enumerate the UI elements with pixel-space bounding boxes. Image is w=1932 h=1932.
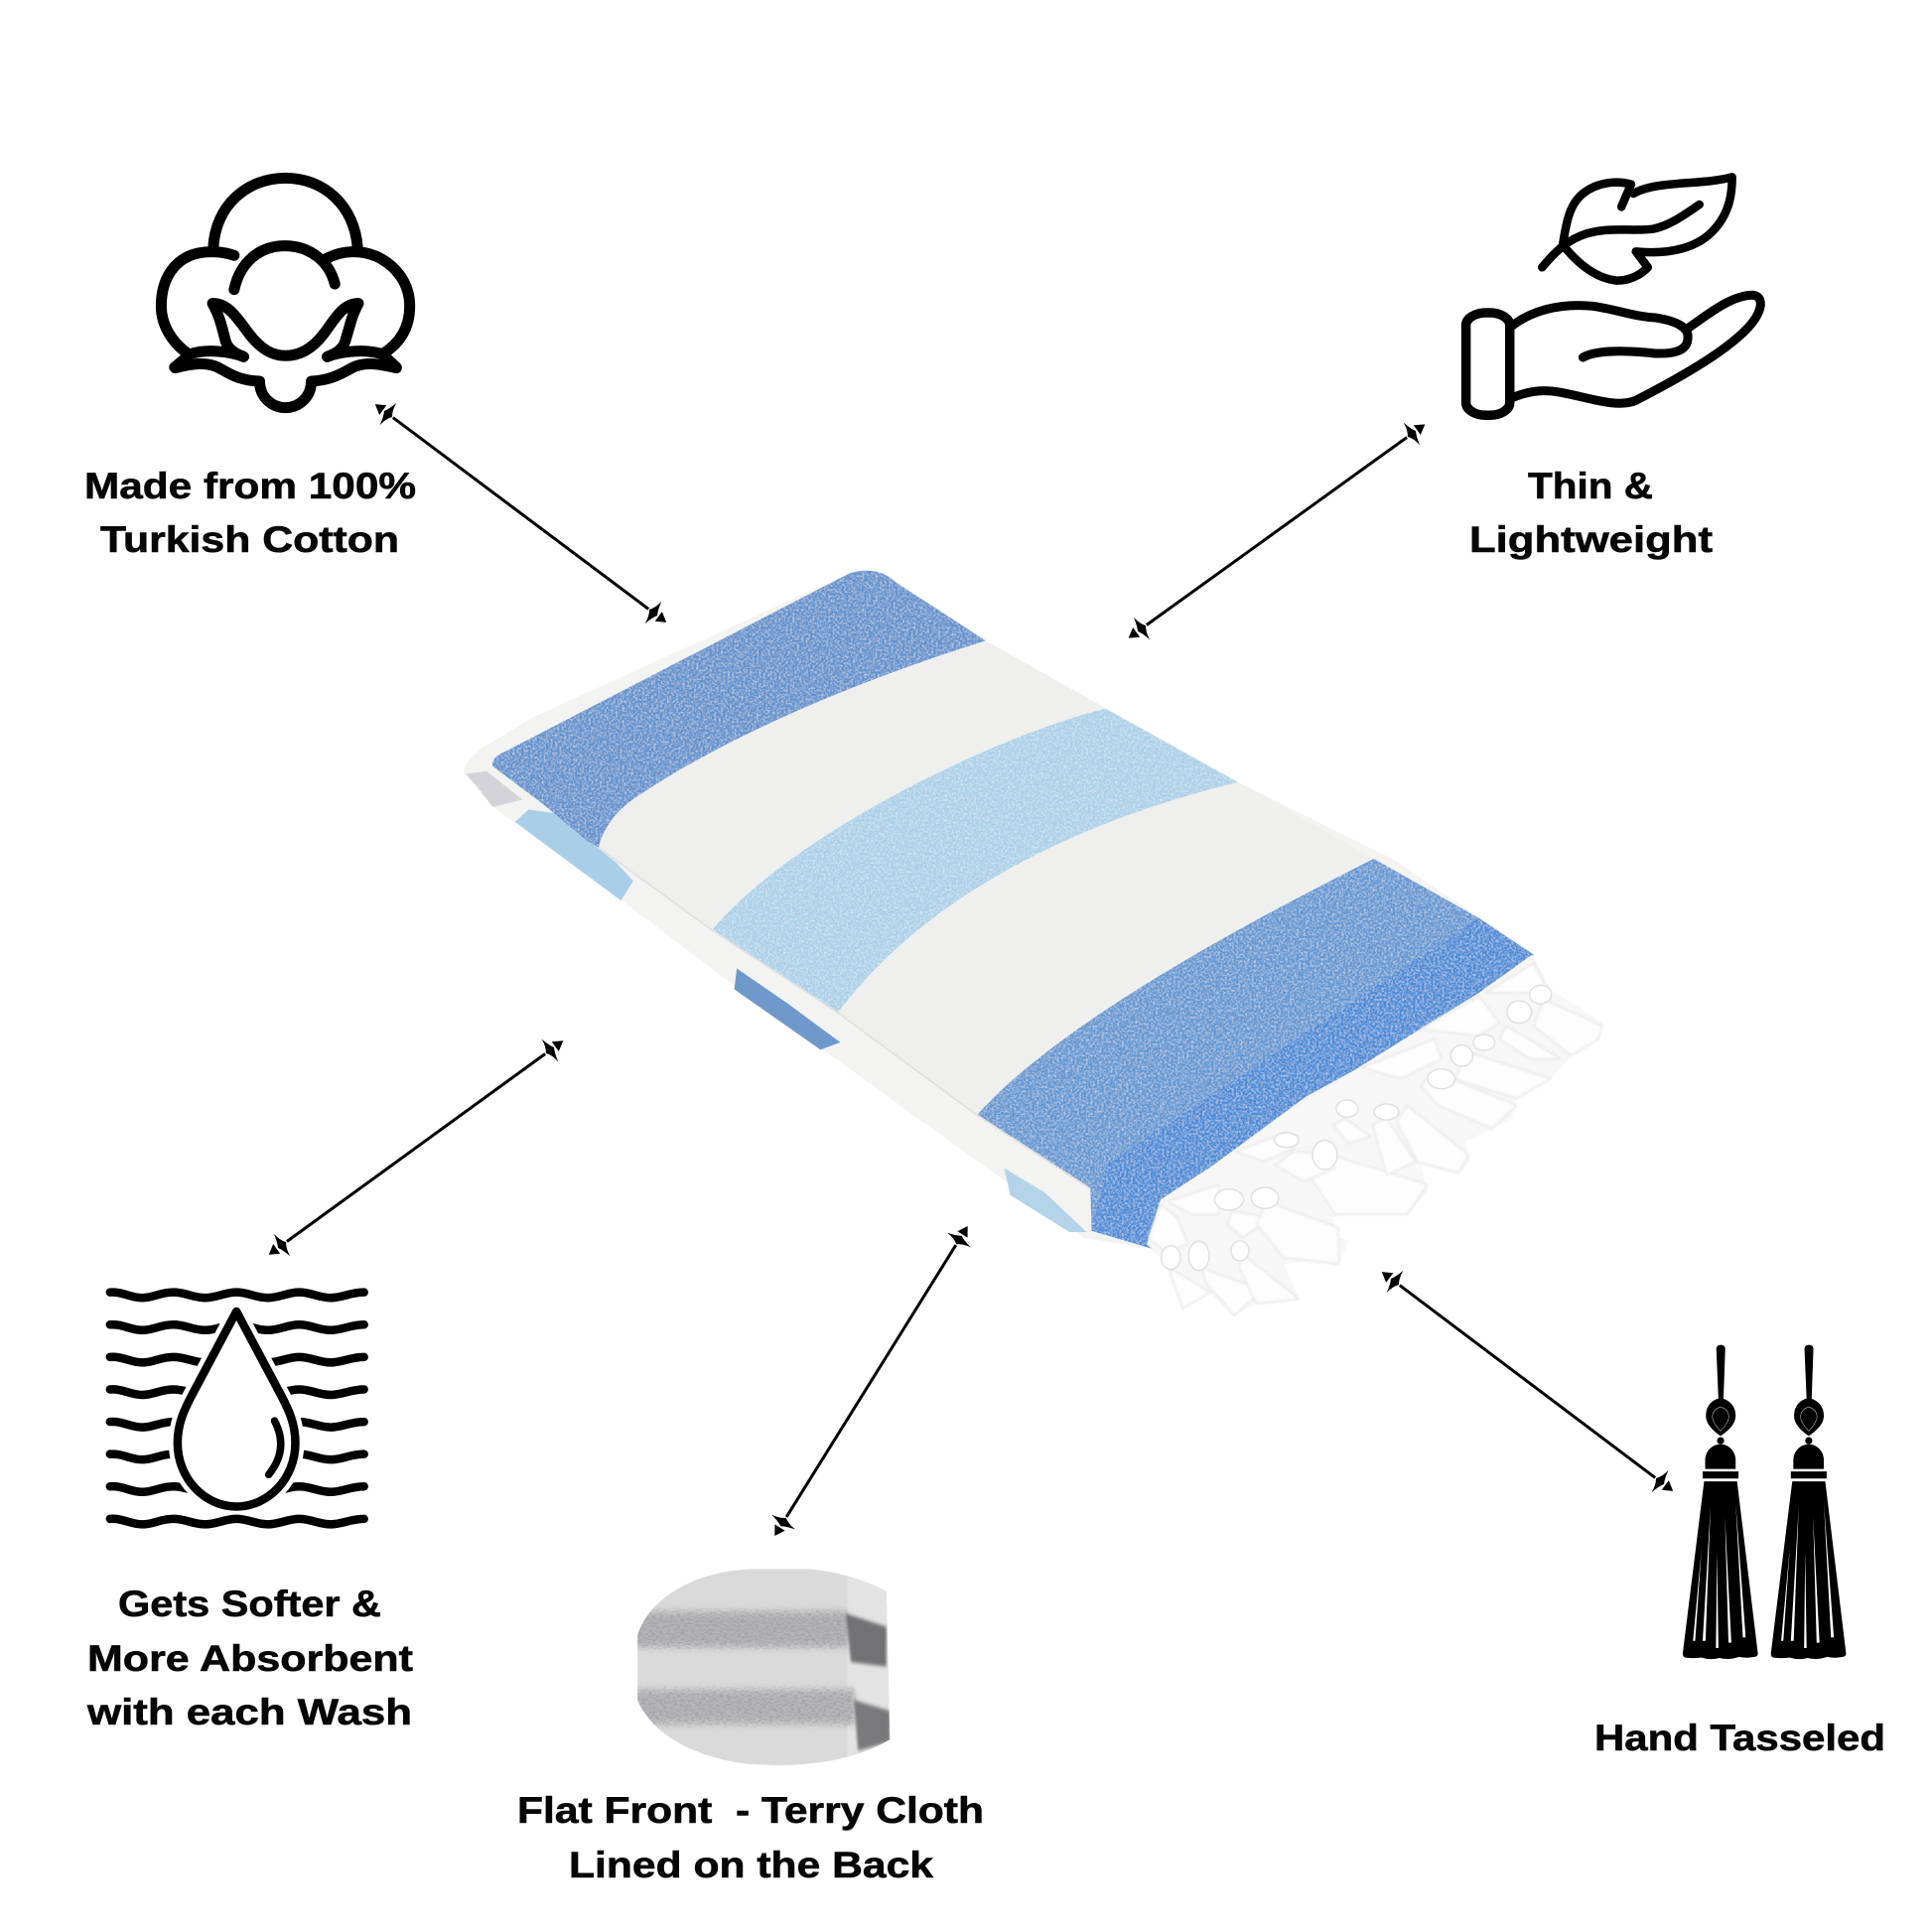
- label: flat front terry cloth: [517, 1790, 984, 1885]
- fold shadow: [466, 771, 522, 807]
- lower layer stripes: [515, 809, 1087, 1232]
- tassel right: [1771, 1345, 1846, 1659]
- white band 2: [838, 782, 1374, 1115]
- label: thin and lightweight: Lightweight: [1469, 519, 1713, 560]
- label: thin and lightweight: Thin &: [1528, 466, 1653, 506]
- top layer edge shadow: [599, 848, 1090, 1189]
- arrow: absorbent to towel: [287, 1054, 545, 1241]
- white band 1: [599, 640, 1105, 930]
- arrow: tassel to towel: [1400, 1286, 1655, 1477]
- label: flat front terry cloth: Flat Front - Terry Cloth: [517, 1790, 984, 1831]
- label: turkish cotton: Turkish Cotton: [100, 519, 399, 560]
- label: turkish cotton: [84, 466, 416, 560]
- label: hand tasseled: Hand Tasseled: [1594, 1718, 1885, 1758]
- icon: two black tassels: [1683, 1345, 1846, 1659]
- bottom medium blue stripe: [977, 859, 1478, 1231]
- tassels: [1149, 963, 1602, 1315]
- label: thin and lightweight: [1469, 466, 1713, 560]
- towel product photo: [464, 571, 1602, 1315]
- arrow: cotton to towel: [393, 418, 648, 609]
- fringe silhouette: [1147, 955, 1602, 1315]
- knots: [1162, 985, 1552, 1271]
- image: terry cloth swatch: [637, 1569, 890, 1765]
- label: softer and absorbent: with each Wash: [86, 1692, 412, 1732]
- light blue stripe: [712, 709, 1238, 1013]
- arrow: lightweight to towel: [1147, 437, 1407, 625]
- icon: water drop with waves: [110, 1293, 364, 1524]
- white knotted fringe: [1147, 955, 1602, 1315]
- folded towel body: [464, 571, 1534, 1251]
- icon: leaf over hand: [1466, 177, 1760, 415]
- towel base cloth: [464, 571, 1534, 1251]
- label: flat front terry cloth: Lined on the Back: [569, 1845, 933, 1885]
- label: softer and absorbent: More Absorbent: [87, 1638, 413, 1679]
- label: softer and absorbent: [86, 1584, 413, 1732]
- top dark blue stripe: [492, 571, 986, 848]
- tassel left: [1683, 1345, 1758, 1659]
- label: turkish cotton: Made from 100%: [84, 466, 416, 506]
- arrow: terry cloth to towel: [786, 1245, 956, 1517]
- icon: cotton boll: [161, 178, 410, 408]
- deep blue edge band: [1092, 918, 1534, 1251]
- label: softer and absorbent: Gets Softer &: [118, 1584, 381, 1624]
